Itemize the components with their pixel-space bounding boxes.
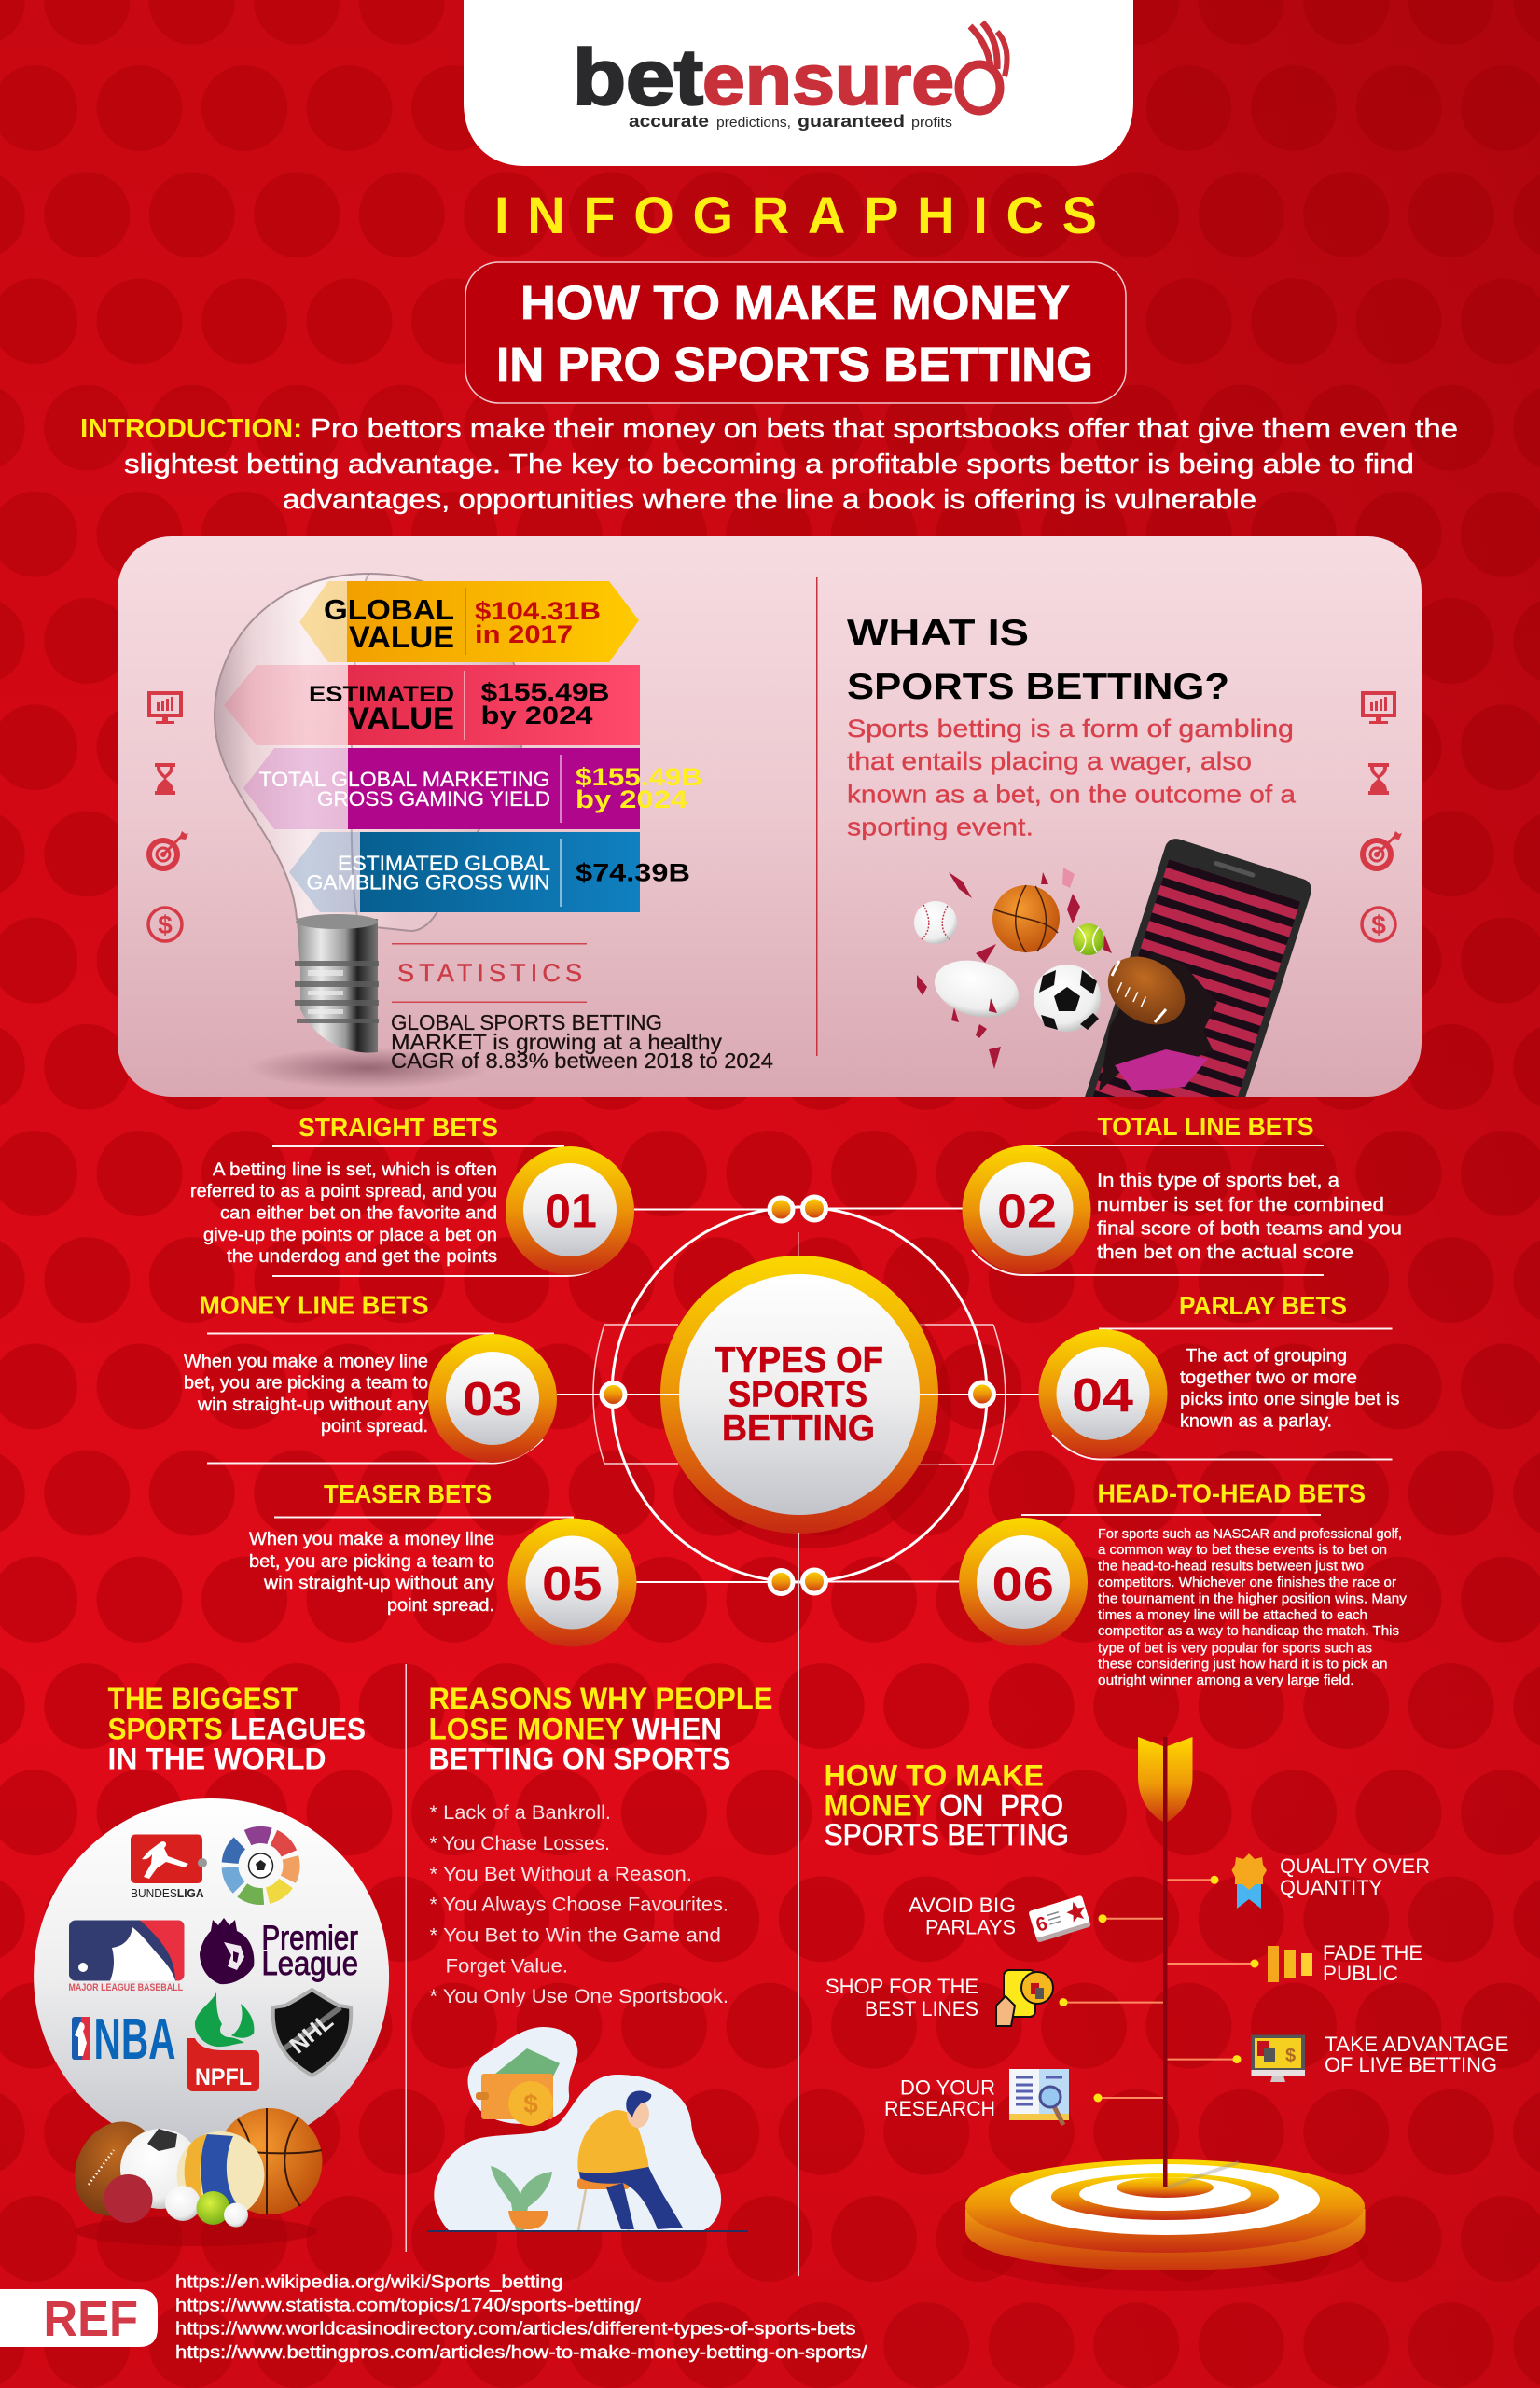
logo: premier league: Premier [261, 1918, 358, 1957]
item 03: money line bets: bet, you are picking a team to [184, 1373, 428, 1394]
item 01: straight bets: STRAIGHT BETS [298, 1113, 498, 1142]
ribbon: global value [299, 581, 639, 662]
introduction text [80, 414, 1458, 515]
tip: do your research: DO YOUR [900, 2076, 995, 2099]
item 01: straight bets: A betting line is set, which is often [213, 1160, 497, 1180]
ribbon: gambling gross win: $74.39B [576, 858, 690, 886]
heading: biggest sports leagues: THE BIGGEST [108, 1682, 298, 1715]
what is sports betting: known as a bet, on the outcome of a [847, 780, 1297, 808]
item 02: total line bets: then bet on the actual score [1097, 1243, 1353, 1263]
tip: fade the public [1168, 1941, 1422, 1985]
item 06: head-to-head bets: times a money line will be attached to each [1098, 1608, 1367, 1623]
list: reasons: * You Bet to Win the Game and [429, 1925, 721, 1946]
references: https://en.wikipedia.org/wiki/Sports_betting [175, 2272, 563, 2293]
tip: do your research [884, 2069, 1163, 2125]
item 03: money line bets: point spread. [321, 1417, 428, 1437]
logo: nhl [273, 1990, 351, 2076]
illustration: arrow in target [962, 1737, 1368, 2291]
item 05: teaser bets [249, 1479, 636, 1647]
logo: npfl: NPFL [195, 2064, 252, 2090]
references [0, 2272, 867, 2363]
list: reasons: * Lack of a Bankroll. [429, 1802, 611, 1824]
tip: quality over quantity [1168, 1853, 1430, 1909]
item 04: parlay bets: known as a parlay. [1180, 1412, 1332, 1431]
ribbon: gross gaming yield: by 2024 [576, 785, 687, 813]
tip: avoid big parlays: PARLAYS [925, 1916, 1016, 1938]
item 06: head-to-head bets: competitor as a way to handicap the match. This [1098, 1624, 1399, 1639]
ribbon: estimated value: by 2024 [481, 701, 593, 729]
tip: avoid big parlays [909, 1894, 1163, 1943]
item 02: total line bets [963, 1112, 1402, 1275]
item 01: straight bets: give-up the points or place a bet on [203, 1226, 497, 1245]
panel: league logos [34, 1798, 389, 2246]
heading: reasons why people lose money: BETTING ON SPORTS [429, 1742, 731, 1776]
item 05: teaser bets: 05 [542, 1557, 603, 1610]
heading: how to make money on pro sports betting: HOW TO MAKE [825, 1759, 1044, 1793]
ribbon: gambling gross win [289, 832, 690, 912]
ribbon: global value: $104.31B [475, 597, 601, 625]
logo: major league baseball [69, 1920, 185, 1993]
item 03: money line bets: When you make a money line [184, 1353, 428, 1371]
tip: quality over quantity: QUALITY OVER [1280, 1854, 1430, 1878]
item 06: head-to-head bets: a common way to bet these events is to bet on [1098, 1543, 1387, 1558]
item 06: head-to-head bets: these considering just how hard it is to pick an [1098, 1657, 1388, 1672]
logo: premier league [200, 1918, 358, 1984]
item 05: teaser bets: TEASER BETS [324, 1479, 492, 1508]
statistics block [391, 943, 773, 1073]
item 01: straight bets: 01 [545, 1185, 597, 1237]
balls and shards [914, 868, 1198, 1069]
statistics block: GLOBAL SPORTS BETTING [391, 1010, 662, 1034]
introduction text: slightest betting advantage. The key to becoming a profitable sports bettor is being able to find [124, 450, 1414, 479]
logo: major league baseball: MAJOR LEAGUE BASEBALL [69, 1982, 183, 1993]
ribbon: gross gaming yield [243, 748, 702, 829]
introduction text: advantages, opportunities where the line a book is offering is vulnerable [283, 485, 1256, 515]
item 04: parlay bets [1039, 1291, 1399, 1459]
tip: take advantage of live betting: TAKE ADVANTAGE [1325, 2033, 1509, 2056]
item 01: straight bets: the underdog and get the points [227, 1247, 497, 1267]
panel: statistics and what is sports betting [118, 536, 1422, 1097]
tip: take advantage of live betting: OF LIVE BETTING [1325, 2053, 1497, 2076]
references: REF [43, 2291, 138, 2347]
tip: avoid big parlays: 6 [1034, 1912, 1050, 1937]
item 04: parlay bets: PARLAY BETS [1179, 1291, 1347, 1320]
logo: nhl: NHL [284, 2008, 339, 2059]
illustration: phone with sports balls [914, 839, 1311, 1097]
ribbon: gambling gross win: GAMBLING GROSS WIN [306, 871, 550, 894]
icon column left [147, 691, 188, 941]
item 01: straight bets: referred to as a point spread, and you [190, 1182, 497, 1201]
tip: shop for the best lines: BEST LINES [865, 1997, 978, 2020]
list: reasons: * You Always Choose Favourites. [429, 1894, 728, 1916]
list: reasons: * You Only Use One Sportsbook. [429, 1986, 728, 2007]
item 06: head-to-head bets: the tournament in the higher position wins. Many [1098, 1591, 1408, 1606]
item 02: total line bets: final score of both teams and you [1097, 1218, 1402, 1239]
item 02: total line bets: number is set for the combined [1097, 1195, 1384, 1215]
tip: shop for the best lines [825, 1970, 1163, 2026]
logo card [464, 0, 1133, 166]
list: reasons: Forget Value. [446, 1955, 568, 1978]
logo: npfl [187, 1992, 259, 2091]
ribbon: estimated value: ESTIMATED [309, 682, 454, 707]
heading: biggest sports leagues: SPORTS LEAGUES [108, 1713, 366, 1746]
references: https://www.worldcasinodirectory.com/articles/different-types-of-sports-bets [175, 2319, 856, 2339]
introduction text: Pro bettors make their money on bets that sportsbooks offer that give them even the [311, 414, 1458, 444]
what is sports betting [847, 613, 1297, 841]
logo: nba [72, 2007, 175, 2072]
central hub: types of sports betting: TYPES OF [715, 1340, 883, 1381]
heading: biggest sports leagues: IN THE WORLD [108, 1742, 326, 1776]
item 05: teaser bets: When you make a money line [249, 1530, 494, 1549]
references: https://www.statista.com/topics/1740/sports-betting/ [175, 2297, 642, 2315]
heading: how to make money on pro sports betting [825, 1759, 1069, 1852]
tagline: guaranteed [798, 112, 905, 131]
introduction text: INTRODUCTION: [80, 414, 302, 444]
logo card: bet [573, 34, 703, 121]
ribbon: gross gaming yield: $155.49B [576, 763, 702, 791]
tip: fade the public: FADE THE [1323, 1941, 1422, 1965]
what is sports betting: Sports betting is a form of gambling [847, 715, 1294, 743]
ribbon: global value: VALUE [349, 620, 454, 654]
logo: premier league: League [261, 1944, 358, 1982]
heading: biggest sports leagues [108, 1682, 366, 1776]
central hub: types of sports betting: SPORTS [728, 1375, 867, 1414]
statistics block: STATISTICS [397, 959, 582, 987]
item 02: total line bets: TOTAL LINE BETS [1097, 1112, 1313, 1141]
statistics block: MARKET is growing at a healthy [391, 1030, 723, 1054]
item 06: head-to-head bets: For sports such as NASCAR and professional golf, [1098, 1527, 1402, 1542]
item 02: total line bets: 02 [997, 1185, 1057, 1237]
title box: IN PRO SPORTS BETTING [496, 338, 1093, 391]
heading: how to make money on pro sports betting: SPORTS BETTING [825, 1818, 1069, 1852]
heading: reasons why people lose money: REASONS WHY PEOPLE [429, 1682, 772, 1715]
icon: logo mark [959, 22, 1007, 111]
icon: light bulb [215, 574, 524, 1089]
item 06: head-to-head bets: outright winner among a very large field. [1098, 1673, 1354, 1688]
illustration: pile of balls [60, 2108, 323, 2246]
item 04: parlay bets: picks into one single bet is [1180, 1390, 1399, 1409]
item 06: head-to-head bets: 06 [992, 1558, 1054, 1610]
list: reasons: * You Bet Without a Reason. [429, 1864, 692, 1885]
ribbon: global value: GLOBAL [324, 593, 454, 626]
heading: how to make money on pro sports betting: MONEY ON PRO [825, 1789, 1063, 1823]
tagline [629, 112, 952, 131]
ribbon: estimated value: VALUE [348, 701, 454, 735]
tip: take advantage of live betting: $ [1285, 2046, 1296, 2066]
item 04: parlay bets: 04 [1072, 1368, 1134, 1422]
item 03: money line bets: MONEY LINE BETS [200, 1291, 429, 1319]
title box [465, 262, 1126, 403]
item 04: parlay bets: The act of grouping [1186, 1347, 1347, 1366]
item 03: money line bets: win straight-up without any [197, 1395, 429, 1415]
item 02: total line bets: In this type of sports bet, a [1097, 1171, 1340, 1191]
list: reasons: * You Chase Losses. [429, 1833, 610, 1854]
tip: quality over quantity: QUANTITY [1280, 1876, 1382, 1899]
statistics block: CAGR of 8.83% between 2018 to 2024 [391, 1048, 773, 1073]
ribbon: estimated value: $155.49B [481, 678, 610, 706]
what is sports betting: that entails placing a wager, also [847, 747, 1252, 775]
heading: reasons why people lose money: LOSE MONEY WHEN [429, 1713, 722, 1746]
logo: bundesliga [131, 1834, 207, 1900]
item 04: parlay bets: together two or more [1180, 1368, 1357, 1388]
tagline: accurate [629, 112, 709, 131]
item 05: teaser bets: point spread. [387, 1596, 494, 1616]
references: https://www.bettingpros.com/articles/how-to-make-money-betting-on-sports/ [175, 2343, 867, 2363]
icon column right [1361, 691, 1402, 941]
logo: la liga [217, 1822, 304, 1909]
tip: fade the public: PUBLIC [1323, 1962, 1398, 1985]
item 06: head-to-head bets [959, 1479, 1408, 1688]
tip: take advantage of live betting [1168, 2033, 1509, 2082]
ribbon: global value: in 2017 [475, 620, 573, 648]
central hub: types of sports betting: BETTING [722, 1409, 875, 1449]
tip: shop for the best lines: SHOP FOR THE [825, 1975, 978, 1998]
item 01: straight bets [190, 1113, 634, 1276]
illustration: worried man and wallet: $ [523, 2090, 538, 2118]
icon column left: $ [158, 910, 173, 939]
tagline: profits [911, 115, 952, 131]
item 06: head-to-head bets: competitors. Whichever one finishes the race or [1098, 1576, 1396, 1590]
item 06: head-to-head bets: type of bet is very popular for sports such as [1098, 1642, 1372, 1657]
list: reasons [429, 1802, 728, 2007]
item 03: money line bets: 03 [463, 1372, 522, 1425]
what is sports betting: WHAT IS [847, 613, 1029, 653]
what is sports betting: SPORTS BETTING? [847, 667, 1229, 707]
ribbon: gross gaming yield: GROSS GAMING YIELD [317, 787, 550, 811]
item 06: head-to-head bets: the head-to-head results between just two [1098, 1560, 1364, 1575]
logo card: ensure [702, 41, 954, 120]
what is sports betting: sporting event. [847, 813, 1034, 841]
tagline: predictions, [716, 115, 791, 131]
ribbon: gross gaming yield: TOTAL GLOBAL MARKETING [259, 768, 550, 791]
item 05: teaser bets: bet, you are picking a team to [249, 1552, 494, 1572]
central hub: types of sports betting [557, 1197, 1039, 2276]
item 06: head-to-head bets: HEAD-TO-HEAD BETS [1097, 1479, 1366, 1507]
ribbon: estimated value [224, 665, 640, 745]
tip: do your research: RESEARCH [884, 2097, 995, 2120]
heading: reasons why people lose money [429, 1682, 772, 1776]
item 01: straight bets: can either bet on the favorite and [220, 1203, 497, 1224]
icon column right: $ [1371, 910, 1386, 939]
tip: avoid big parlays: AVOID BIG [909, 1894, 1016, 1917]
item 03: money line bets [184, 1291, 557, 1463]
ribbon: gambling gross win: ESTIMATED GLOBAL [338, 852, 550, 875]
item 05: teaser bets: win straight-up without any [263, 1574, 495, 1593]
title box: HOW TO MAKE MONEY [520, 276, 1070, 329]
heading: infographics: INFOGRAPHICS [494, 186, 1097, 244]
logo: bundesliga: BUNDESLIGA [131, 1886, 204, 1900]
illustration: worried man and wallet [427, 2027, 748, 2232]
logo: nba: NBA [93, 2007, 175, 2072]
